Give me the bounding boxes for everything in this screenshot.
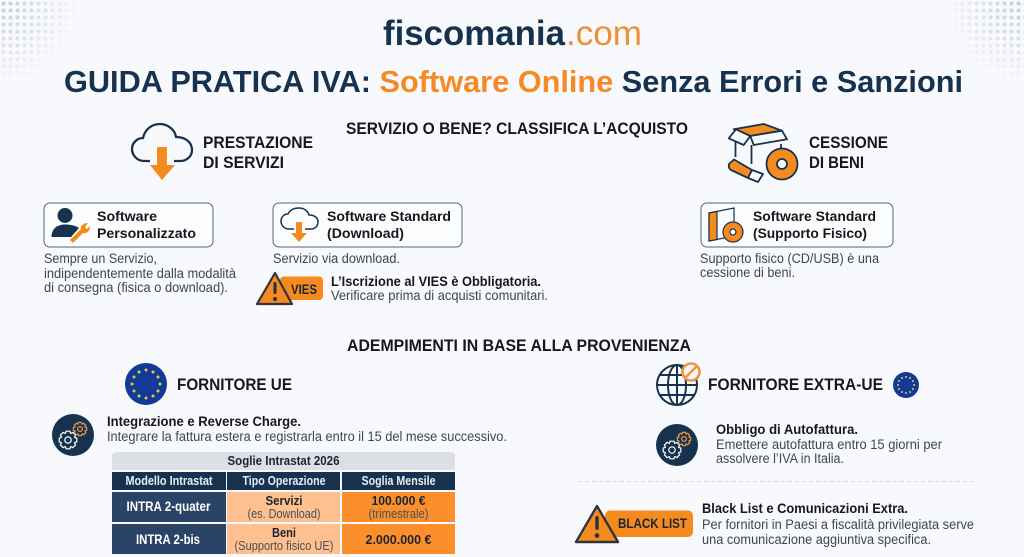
badge: VIES warning: VIES xyxy=(291,282,317,297)
card: software standard download: (Download) xyxy=(327,225,404,241)
section heading: classifica: SERVIZIO O BENE? CLASSIFICA L’ACQUISTO xyxy=(346,120,688,138)
icon: EU flag xyxy=(125,363,167,405)
table title: Soglie Intrastat 2026 xyxy=(228,453,340,468)
text: black list note: Per fornitori in Paesi a fiscalità privilegiata serve xyxy=(702,517,974,532)
icon: globe with prohibition sign xyxy=(657,364,700,405)
text: obbligo di autofattura: Obbligo di Autofattura. xyxy=(716,421,858,437)
text: supporto fisico description: cessione di beni. xyxy=(700,265,795,280)
card: software standard supporto fisico: Software Standard xyxy=(753,208,876,224)
heading: cessione di beni: CESSIONE xyxy=(809,134,888,152)
table title xyxy=(112,452,455,470)
logo: fiscomania xyxy=(383,14,566,53)
text: supporto fisico description: Supporto fisico (CD/USB) è una xyxy=(700,251,879,266)
card: software standard supporto fisico xyxy=(701,203,893,247)
table row: intra 2-bis: (Supporto fisico UE) xyxy=(234,539,334,553)
text: personalizzato description: Sempre un Servizio, xyxy=(44,251,157,266)
text: integrazione e reverse charge xyxy=(107,413,507,444)
heading: cessione di beni: DI BENI xyxy=(809,154,864,172)
table row: intra 2-quater: 100.000 € xyxy=(372,493,426,508)
text: black list note xyxy=(702,500,974,547)
logo: .com xyxy=(566,14,642,53)
text: supporto fisico description xyxy=(700,251,879,280)
table row: intra 2-bis xyxy=(112,524,455,554)
text: black list note: una comunicazione aggiuntiva specifica. xyxy=(702,532,931,547)
title: GUIDA PRATICA IVA: Software Online Senza Errori e Sanzioni xyxy=(64,64,963,99)
section heading: adempimenti: ADEMPIMENTI IN BASE ALLA PROVENIENZA xyxy=(347,337,691,355)
card: software personalizzato: Software xyxy=(97,208,157,224)
table header: Modello Intrastat xyxy=(126,474,213,488)
text: integrazione e reverse charge: Integrare la fattura estera e registrarla entro il 15 del mese successivo. xyxy=(107,429,507,444)
text: personalizzato description xyxy=(44,251,236,295)
badge: black list warning xyxy=(576,506,693,542)
text: obbligo di autofattura: Emettere autofattura entro 15 giorni per xyxy=(716,437,942,452)
card: software personalizzato xyxy=(44,203,213,247)
text: download description: Servizio via download. xyxy=(273,251,400,266)
table row: intra 2-bis: 2.000.000 € xyxy=(366,532,432,547)
icon: small cloud download xyxy=(281,208,318,242)
badge: black list warning: BLACK LIST xyxy=(618,515,687,531)
text: VIES note: Verificare prima di acquisti comunitari. xyxy=(331,288,548,303)
text: personalizzato description: di consegna (fisica o download). xyxy=(44,280,228,295)
table: soglie intrastat xyxy=(112,452,455,554)
icon: person with wrench xyxy=(52,208,90,243)
card: software standard download xyxy=(273,203,462,247)
table header: Tipo Operazione xyxy=(242,474,326,488)
card: software standard download: Software Standard xyxy=(327,208,451,224)
text: VIES note: L’Iscrizione al VIES è Obbligatoria. xyxy=(331,273,541,289)
heading: prestazione di servizi: PRESTAZIONE xyxy=(203,134,313,152)
table row: intra 2-quater: (trimestrale) xyxy=(368,507,428,521)
text: VIES note xyxy=(331,273,548,303)
text: personalizzato description: indipendentemente dalla modalità xyxy=(44,266,236,281)
text: obbligo di autofattura xyxy=(716,421,942,466)
table row: intra 2-bis: Beni xyxy=(272,525,296,540)
text: obbligo di autofattura: assolvere l’IVA in Italia. xyxy=(716,451,844,466)
text: black list note: Black List e Comunicazioni Extra. xyxy=(702,500,908,516)
table row: intra 2-bis: INTRA 2-bis xyxy=(136,532,200,547)
card: software standard supporto fisico: (Supporto Fisico) xyxy=(753,225,867,241)
icon: small EU flag xyxy=(893,372,919,398)
icon: box, usb and disc xyxy=(729,124,798,182)
heading: prestazione di servizi: DI SERVIZI xyxy=(203,154,284,172)
heading: cessione di beni xyxy=(809,134,888,172)
heading: fornitore extra-UE: FORNITORE EXTRA-UE xyxy=(708,376,883,394)
card: software personalizzato: Personalizzato xyxy=(97,225,196,241)
table row: intra 2-quater: INTRA 2-quater xyxy=(126,499,211,514)
table row: intra 2-quater: (es. Download) xyxy=(248,507,320,521)
icon: cloud download xyxy=(132,124,192,180)
table header: Soglia Mensile xyxy=(362,474,436,488)
text: integrazione e reverse charge: Integrazione e Reverse Charge. xyxy=(107,413,301,429)
icon: gears xyxy=(52,414,94,456)
icon: gears extra-UE xyxy=(656,424,698,466)
heading: prestazione di servizi xyxy=(203,134,313,172)
table header xyxy=(112,472,455,490)
badge: VIES warning xyxy=(257,273,323,304)
icon: software box and disc xyxy=(709,208,743,242)
table row: intra 2-quater xyxy=(112,492,455,522)
table row: intra 2-quater: Servizi xyxy=(266,493,302,508)
heading: fornitore UE: FORNITORE UE xyxy=(177,376,292,394)
